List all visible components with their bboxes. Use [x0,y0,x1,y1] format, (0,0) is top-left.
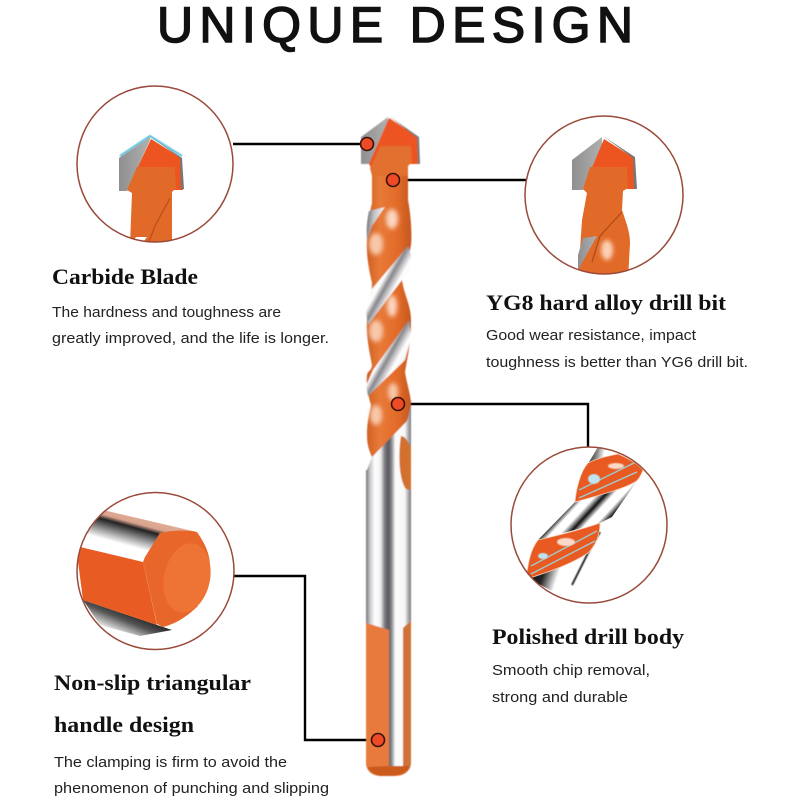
text block: YG8 hard alloy drill bit: Good wear resistance, impact [486,327,697,344]
text block: non-slip handle [54,670,329,797]
text block: YG8 hard alloy drill bit: toughness is better than YG6 drill bit. [486,354,748,371]
text block: polished drill body [492,624,684,706]
text block: non-slip handle: phenomenon of punching and slipping [54,780,329,797]
callout lines: carbide blade [233,143,367,145]
callout lines: polished body [398,404,588,447]
text block: carbide blade: greatly improved, and the life is longer. [52,330,329,347]
text block: non-slip handle: Non-slip triangular [54,670,251,695]
text block: carbide blade: The hardness and toughness are [52,304,281,321]
text block: polished drill body: Smooth chip removal, [492,662,650,679]
text block: carbide blade: Carbide Blade [52,264,198,289]
marker: body [392,398,404,410]
text block: polished drill body: strong and durable [492,689,628,706]
text block: carbide blade [52,264,329,347]
marker: carbide tip [360,138,374,150]
text block: polished drill body: Polished drill body [492,624,684,649]
text block: non-slip handle: handle design [54,712,194,737]
marker: handle [372,734,384,746]
detail circle: YG8 drill bit [525,116,683,280]
detail circle: carbide blade [77,86,233,244]
detail circle: triangular handle [76,492,234,650]
text block: YG8 hard alloy drill bit [486,290,748,371]
text block: non-slip handle: The clamping is firm to avoid the [54,754,287,771]
marker: neck [386,174,400,186]
detail circle: polished drill body [511,447,667,603]
callout lines: YG8 [393,179,527,181]
callout lines: handle [234,576,378,740]
drill bit [361,116,420,776]
text block: YG8 hard alloy drill bit: YG8 hard alloy drill bit [486,290,727,315]
